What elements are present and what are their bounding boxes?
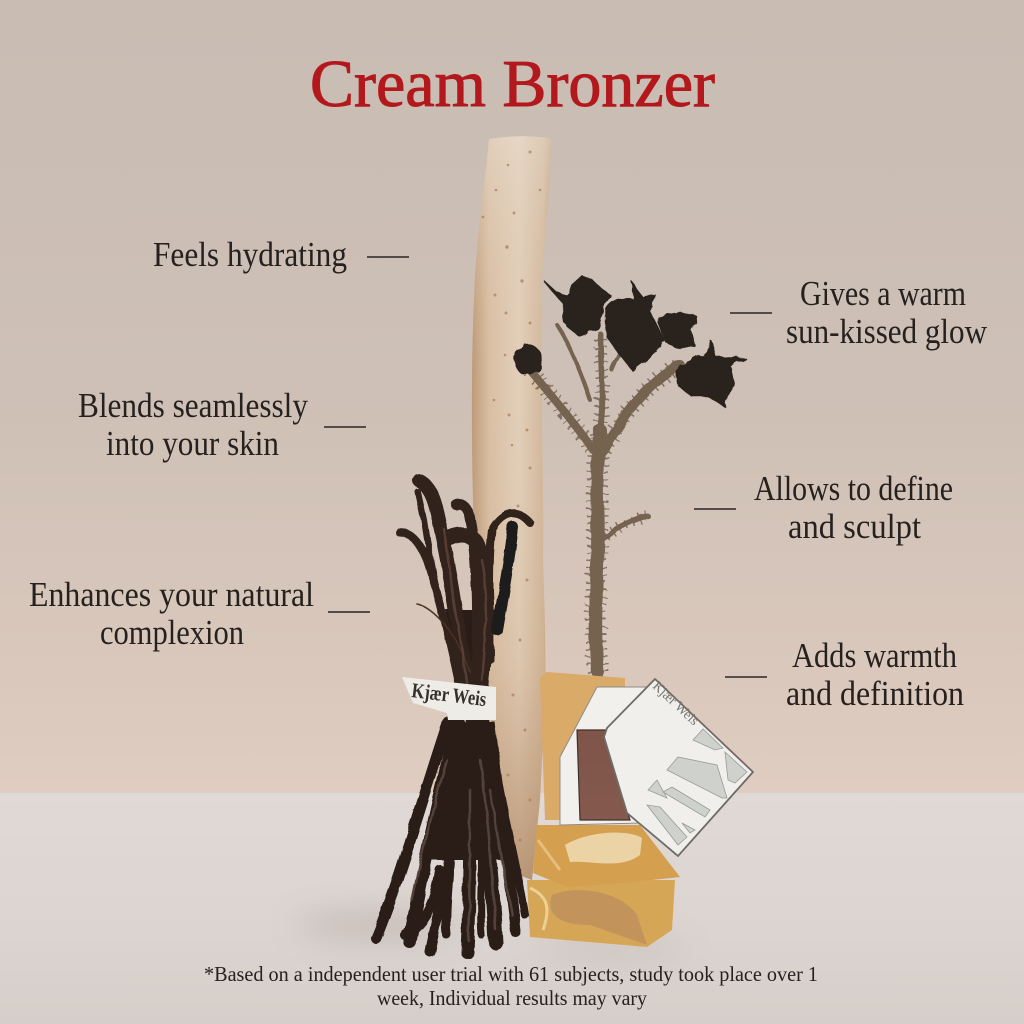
middle wax block	[533, 825, 680, 887]
plant spines	[530, 335, 680, 672]
lower pod highlights	[412, 760, 512, 940]
vanilla bundle	[376, 481, 530, 952]
lid cut-outs	[647, 729, 747, 845]
callout: warm glow: sun-kissed glow	[786, 312, 988, 351]
callout: enhances complexion: Enhances your natural	[29, 575, 314, 614]
compact base	[560, 687, 662, 825]
lower vanilla pods	[428, 722, 512, 860]
vanilla tag: Kjær Weis	[410, 678, 488, 711]
footnote	[204, 962, 818, 1010]
background wall	[0, 0, 1024, 794]
title: Cream Bronzer	[310, 47, 715, 121]
table surface	[0, 793, 1024, 1024]
bottom wax block	[527, 880, 675, 947]
callout: blends seamlessly: into your skin	[106, 424, 279, 463]
callout: enhances complexion: complexion	[100, 613, 244, 652]
beeswax stack	[527, 672, 680, 947]
callout: define and sculpt: and sculpt	[788, 507, 921, 546]
dried plant	[515, 276, 745, 672]
top wax block	[540, 672, 625, 820]
callout: warmth and definition	[786, 636, 964, 713]
callout: feels hydrating: Feels hydrating	[153, 235, 347, 274]
callout: warmth and definition: Adds warmth	[792, 636, 957, 675]
callout: define and sculpt	[754, 469, 953, 546]
table shadow	[295, 913, 690, 954]
bronzer pan	[577, 730, 630, 820]
footnote: *Based on a independent user trial with 61 subjects, study took place over 1	[204, 962, 818, 986]
lid logo: Kjær Weis	[649, 679, 701, 729]
callout: blends seamlessly	[78, 386, 308, 463]
plant stems	[530, 325, 680, 672]
root pores	[482, 150, 541, 842]
callout: warmth and definition: and definition	[786, 674, 964, 713]
upper pod highlights	[445, 530, 486, 690]
footnote: week, Individual results may vary	[377, 986, 647, 1010]
callout: define and sculpt: Allows to define	[754, 469, 953, 508]
root stalk	[472, 136, 551, 880]
seed heads	[515, 276, 745, 406]
callout: warm glow	[786, 274, 988, 351]
upper vanilla pods	[399, 481, 530, 700]
callout: enhances complexion	[29, 575, 314, 652]
callout: blends seamlessly: Blends seamlessly	[78, 386, 308, 425]
compact lid	[604, 679, 753, 856]
callout lines	[324, 257, 772, 677]
vanilla tag	[402, 677, 496, 720]
callout: warm glow: Gives a warm	[800, 274, 966, 313]
